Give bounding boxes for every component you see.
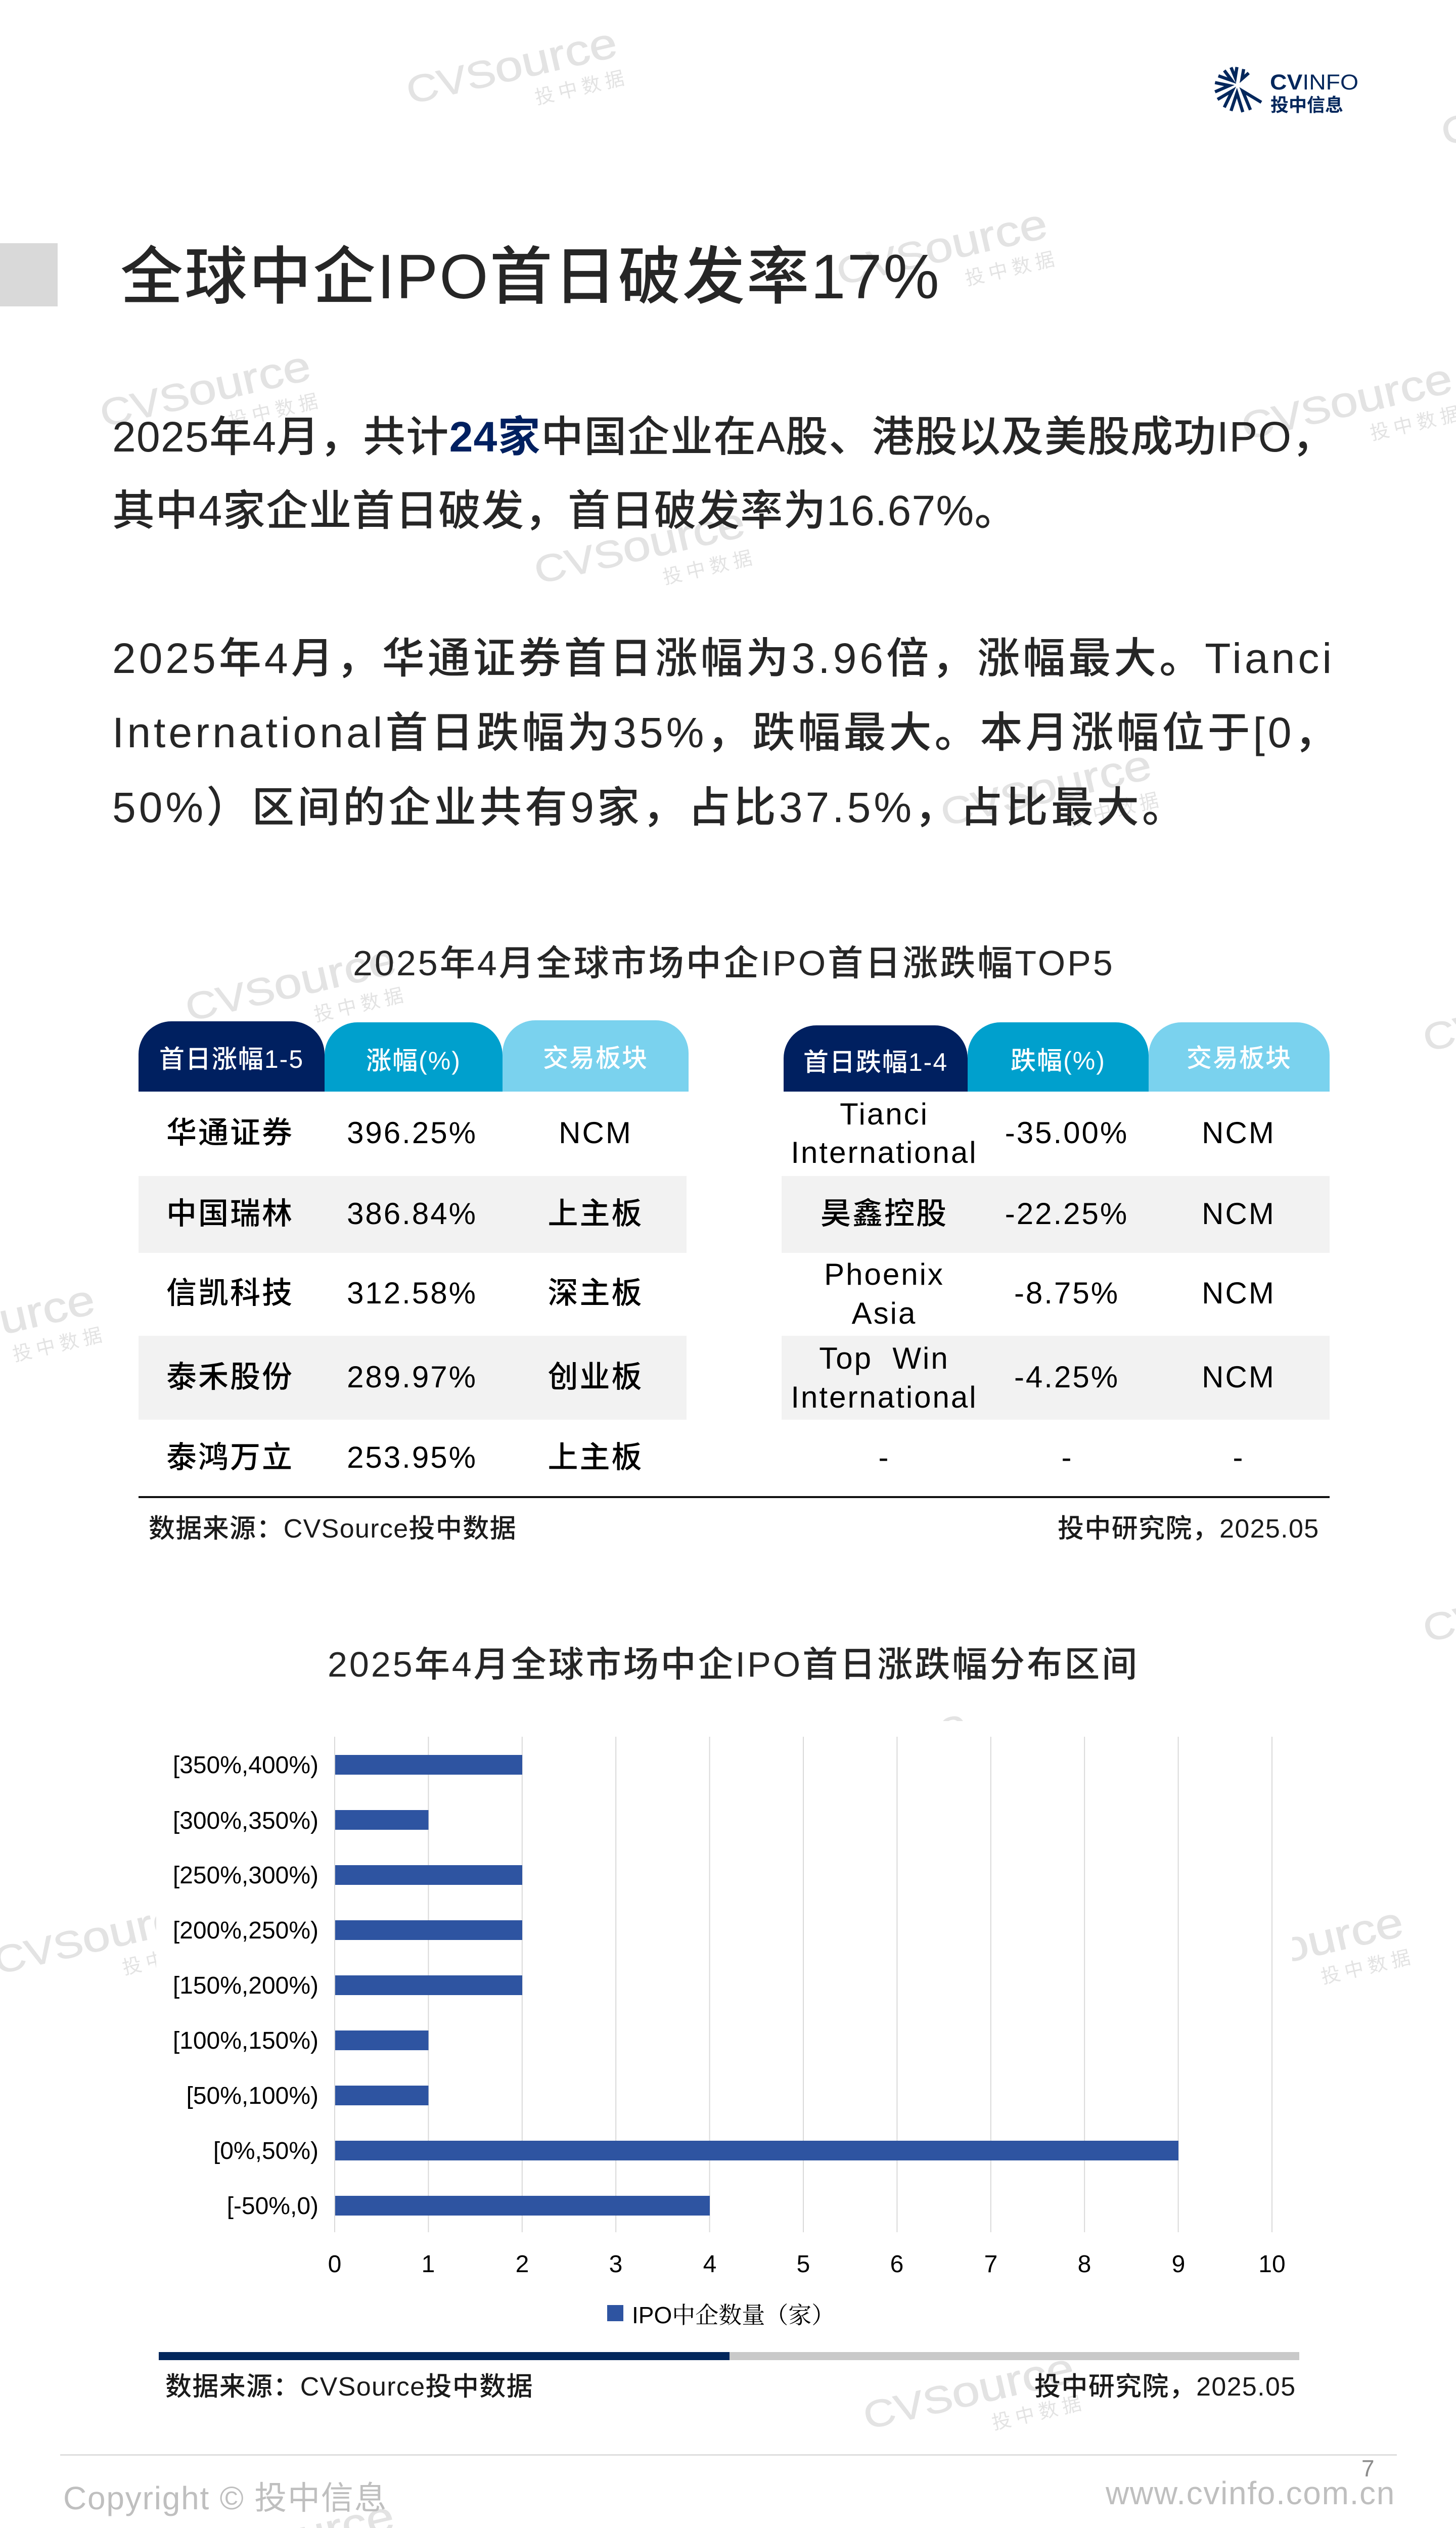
y axis labels: [0%,50%) [213, 2138, 318, 2164]
background watermarks: 投中数据 [533, 68, 626, 109]
row: 泰禾股份 [166, 1360, 643, 1394]
row: 昊鑫控股: NCM [1202, 1197, 1276, 1231]
row: 信凯科技: 信凯科技 [166, 1276, 294, 1310]
row: Phoenix Asia: -8.75% [1014, 1276, 1119, 1310]
table header: gainers [139, 1020, 689, 1092]
y axis labels: [100%,150%) [173, 2027, 318, 2054]
background watermarks: CVSource [1237, 354, 1456, 449]
y axis labels: [50%,100%) [186, 2083, 318, 2109]
y axis labels: [200%,250%) [173, 1917, 318, 1944]
row: 华通证券: NCM [559, 1116, 632, 1150]
row: empty [879, 1440, 1244, 1474]
y axis labels: [250%,300%) [173, 1862, 318, 1889]
title: 全球中企IPO首日破发率17% [120, 242, 941, 312]
chart legend: IPO中企数量（家） [632, 2302, 835, 2328]
row: 中国瑞林: 386.84% [347, 1197, 477, 1231]
text block: paragraph 2: 50%）区间的企业共有9家，占比37.5%，占比最大。 [112, 784, 1188, 831]
row: Tianci International: -35.00% [1005, 1116, 1128, 1150]
table header: gainers: 涨幅(%) [366, 1047, 461, 1075]
background watermarks: CVSource [1188, 1898, 1407, 1993]
x axis labels: 7 [984, 2251, 997, 2278]
row: 中国瑞林: 中国瑞林 [166, 1197, 294, 1231]
icon: radiating burst [1215, 67, 1261, 112]
background watermarks: 投中数据 [226, 391, 320, 432]
table header: losers: 首日跌幅1-4 [803, 1048, 948, 1076]
row: 泰鸿万立: 上主板 [548, 1440, 643, 1474]
y axis labels: [350%,400%) [173, 1752, 318, 1779]
table bottom rule [139, 1496, 1330, 1498]
x axis labels: 5 [797, 2251, 810, 2278]
text block: paragraph 1 [112, 413, 1335, 534]
row: 信凯科技 [166, 1276, 643, 1310]
y axis labels: [-50%,0) [227, 2193, 318, 2220]
row: Tianci International: International [791, 1136, 978, 1169]
row shading [782, 1176, 1330, 1420]
row: Top Win International: International [791, 1380, 978, 1414]
background watermarks: 投中数据 [661, 548, 754, 589]
row shading [139, 1176, 687, 1420]
text block: paragraph 1: 其中4家企业首日破发，首日破发率为16.67%。 [112, 487, 1018, 534]
text block: paragraph 2: 2025年4月，华通证券首日涨幅为3.96倍，涨幅最大。Tianci [112, 635, 1335, 682]
row: 中国瑞林 [166, 1197, 643, 1231]
row: empty: - [879, 1440, 890, 1474]
row: 泰禾股份: 泰禾股份 [166, 1360, 294, 1394]
row: Tianci International: Tianci [840, 1097, 929, 1131]
logo: CVINFO 投中信息 [1215, 67, 1358, 115]
text block: paragraph 2 [112, 635, 1340, 831]
row: Tianci International: NCM [1202, 1116, 1276, 1150]
heading: top 5 table: 2025年4月全球市场中企IPO首日涨跌幅TOP5 [353, 943, 1115, 983]
title marker block [0, 243, 58, 306]
x axis labels: 4 [703, 2251, 716, 2278]
row: empty: - [1062, 1440, 1073, 1474]
row: 华通证券: 396.25% [347, 1116, 477, 1150]
row: Phoenix Asia: Asia [852, 1296, 917, 1330]
x axis labels: 10 [1258, 2251, 1286, 2278]
x axis labels: 1 [422, 2251, 435, 2278]
text block: paragraph 1: 2025年4月，共计24家中国企业在A股、港股以及美股成功IPO， [112, 413, 1335, 461]
row: Tianci International [791, 1097, 1276, 1169]
background watermarks: CVSource [180, 935, 400, 1031]
table credit note: 投中研究院，2025.05 [1058, 1514, 1320, 1544]
row: Phoenix Asia [824, 1257, 1276, 1330]
website: www.cvinfo.com.cn [1105, 2475, 1395, 2511]
row: 泰禾股份: 创业板 [548, 1360, 643, 1394]
page number: 7 [1361, 2455, 1375, 2481]
copyright: Copyright © 投中信息 [63, 2480, 387, 2516]
logo chinese name: 投中信息 [1270, 95, 1343, 115]
background watermarks: 投中数据 [312, 985, 405, 1026]
row: Phoenix Asia: NCM [1202, 1276, 1276, 1310]
background watermarks: 投中数据 [1319, 1947, 1413, 1988]
row: 华通证券: 华通证券 [166, 1116, 294, 1150]
row: 泰鸿万立 [166, 1440, 643, 1474]
row: 信凯科技: 312.58% [347, 1276, 477, 1310]
background watermarks: 投中数据 [1067, 790, 1161, 831]
y axis labels: [150%,200%) [173, 1972, 318, 1999]
background watermarks: CVSource [858, 2343, 1078, 2439]
background watermarks: CVSource [936, 740, 1156, 836]
table source note: 数据来源：CVSource投中数据 [149, 1514, 517, 1544]
row: 泰鸿万立: 253.95% [347, 1440, 477, 1474]
background watermarks: CVSource [832, 199, 1052, 295]
row: Top Win International [791, 1341, 1276, 1414]
chart source note: 数据来源：CVSource投中数据 [165, 2372, 533, 2402]
row: 泰禾股份: 289.97% [347, 1360, 477, 1394]
background watermarks: 投中数据 [963, 249, 1057, 290]
y axis labels [173, 1752, 318, 2220]
bars [335, 1755, 1178, 2216]
x axis labels: 2 [516, 2251, 529, 2278]
logo wordmark: CVINFO [1270, 70, 1358, 95]
text block: paragraph 2: International首日跌幅为35%，跌幅最大。本月涨幅位于[0， [112, 709, 1340, 756]
heading: distribution chart: 2025年4月全球市场中企IPO首日涨跌幅分布区间 [328, 1645, 1139, 1684]
x axis labels: 9 [1172, 2251, 1185, 2278]
background watermarks: 投中数据 [120, 1938, 214, 1979]
background watermarks: CVSource [401, 18, 621, 114]
panel: chart white backing [156, 1721, 1292, 2346]
y axis labels: [300%,350%) [173, 1808, 318, 1834]
row: 昊鑫控股: 昊鑫控股 [821, 1197, 948, 1231]
x axis labels: 3 [609, 2251, 622, 2278]
x axis labels [328, 2251, 1286, 2278]
background watermarks: CVSource [751, 1699, 971, 1794]
progress divider [159, 2352, 1299, 2360]
row: 泰鸿万立: 泰鸿万立 [166, 1440, 294, 1474]
table header: losers: 跌幅(%) [1011, 1047, 1106, 1075]
background watermarks: 投中数据 [11, 1325, 104, 1366]
background watermarks: 投中数据 [883, 1748, 976, 1789]
panel: top gainers table [139, 1020, 689, 1474]
row: 中国瑞林: 上主板 [548, 1197, 643, 1231]
row: 华通证券 [166, 1116, 632, 1150]
table header: losers: 交易板块 [1187, 1044, 1292, 1072]
row: 昊鑫控股: -22.25% [1005, 1197, 1128, 1231]
bar chart: first-day change distribution [173, 1737, 1286, 2328]
row: Top Win International: -4.25% [1014, 1360, 1119, 1394]
row: 信凯科技: 深主板 [548, 1276, 643, 1310]
chart credit note: 投中研究院，2025.05 [1034, 2372, 1296, 2402]
table header: gainers: 交易板块 [543, 1044, 648, 1072]
row: Phoenix Asia: Phoenix [824, 1257, 944, 1291]
table header: losers [784, 1022, 1330, 1092]
footer rule [60, 2454, 1397, 2456]
background watermarks: 投中数据 [990, 2393, 1083, 2434]
x axis labels: 6 [890, 2251, 903, 2278]
background watermarks: CVSource [95, 341, 315, 437]
row: 昊鑫控股 [821, 1197, 1276, 1231]
x axis labels: 8 [1078, 2251, 1091, 2278]
panel: top losers table [782, 1022, 1330, 1474]
background watermarks: CVSource [529, 498, 749, 594]
row: Top Win International: Top Win [819, 1341, 949, 1375]
row: empty: - [1233, 1440, 1244, 1474]
x axis labels: 0 [328, 2251, 341, 2278]
table header: gainers: 首日涨幅1-5 [159, 1045, 304, 1073]
row: Top Win International: NCM [1202, 1360, 1276, 1394]
